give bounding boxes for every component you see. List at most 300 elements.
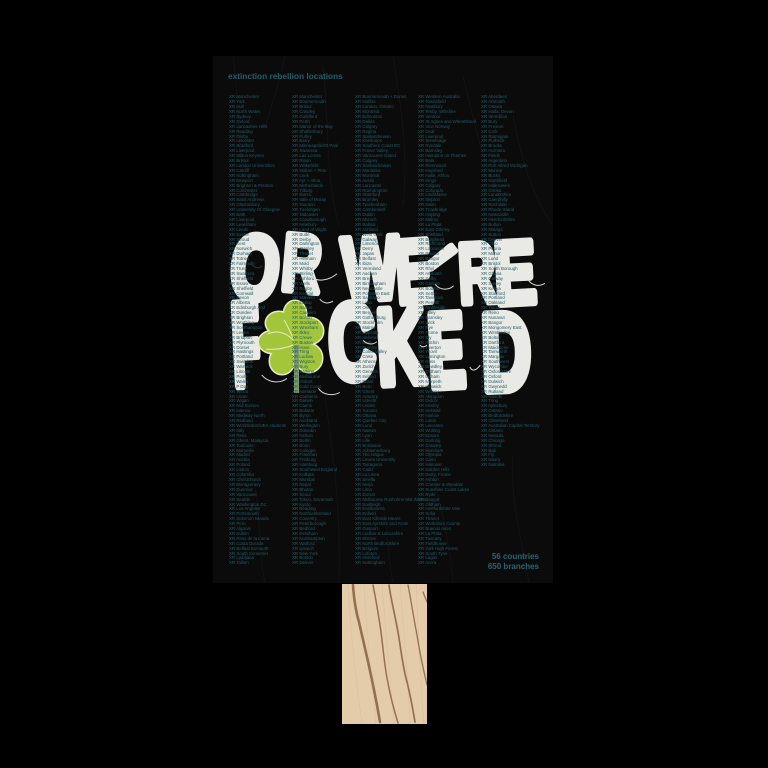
list column 2: XR Buxton xyxy=(292,340,313,345)
list column 4: XR Colorado xyxy=(418,188,443,193)
list column 5: XR Cork xyxy=(481,129,498,134)
list column 3: XR Antwerp xyxy=(355,394,378,399)
list column 3: XR Stockholm xyxy=(355,320,383,325)
list column 5: XR Southwest xyxy=(481,359,509,364)
list column 3: XR Twickenham xyxy=(355,202,387,207)
list column 5: XR Gwynedd xyxy=(481,384,507,389)
list column 1: XR Wigan xyxy=(229,398,249,403)
list column 2: XR Bhutan xyxy=(292,487,313,492)
list column 3: XR Ottawa xyxy=(355,413,376,418)
list column 5: XR Muncie xyxy=(481,168,502,173)
list column 2: XR Ilkley xyxy=(292,330,309,335)
list column 3: XR Galway xyxy=(355,237,377,242)
list column 2: XR Ashford xyxy=(292,276,314,281)
list column 1: XR Lincoln xyxy=(229,369,250,374)
list column 3: XR Lima xyxy=(355,487,372,492)
list column 1: XR Belfast Exmouth xyxy=(229,546,268,551)
list column 2: XR Crawley xyxy=(292,109,315,114)
list column 5: XR Reno xyxy=(481,310,499,315)
list column 1: XR Ljubljana xyxy=(229,555,254,560)
list column 3: XR Manitoba xyxy=(355,168,380,173)
list column 5: XR Rochdale xyxy=(481,202,507,207)
list column 3: XR Kamloops xyxy=(355,138,382,143)
list column 4: XR Deal xyxy=(418,129,434,134)
list column 4: XR Boston xyxy=(418,261,439,266)
list column 2: XR Melbourne xyxy=(292,374,320,379)
list column 4: XR Bangor xyxy=(418,256,439,261)
list column 4: XR Settle xyxy=(418,291,437,296)
list column 1: XR Austria xyxy=(229,457,250,462)
list column 1: XR Sheffield xyxy=(229,276,253,281)
list column 2: XR Tuebingen xyxy=(292,207,320,212)
list column 2: XR Malton + Pitts xyxy=(292,168,326,173)
list column 2: XR Hexham xyxy=(292,256,316,261)
list column 3: XR Eastbourne xyxy=(355,506,385,511)
list column 4: XR Garden Hills xyxy=(418,467,449,472)
list column 3: XR Uppsala xyxy=(355,330,378,335)
list column 4: XR Skipton xyxy=(418,197,440,202)
list column 5: XR Wimbledon xyxy=(481,330,510,335)
list column 3: XR Gosport xyxy=(355,526,378,531)
list column 4: XR Lytham xyxy=(418,374,440,379)
list column 2: XR Ripon xyxy=(292,158,311,163)
list column 3: XR Brest xyxy=(355,276,373,281)
poster wrinkles xyxy=(233,56,553,583)
list column 3: XR Austin xyxy=(355,178,374,183)
list column 4: XR Otley xyxy=(418,310,436,315)
headline: or we're f*cked: E xyxy=(492,223,538,324)
list column 1: XR Lewisham xyxy=(229,222,256,227)
list column 3: XR Nottingham xyxy=(355,560,385,565)
list column 4: XR St Agnes and Wheatsheaf xyxy=(418,119,476,124)
list column 3: XR Elstree xyxy=(355,536,376,541)
list column 1: XR Hastings xyxy=(229,349,253,354)
list column 5: XR Bedfordshire xyxy=(481,413,513,418)
list column 1: XR Tallinn xyxy=(229,560,249,565)
list column 2: XR Purley xyxy=(292,134,312,139)
list column 3: XR Vancouver Island xyxy=(355,153,396,158)
list column 2: XR Nepal xyxy=(292,482,311,487)
list column 3: XR Derry xyxy=(355,246,373,251)
list column 3: XR Potsdam East xyxy=(355,291,390,296)
list column 2: XR Stanley xyxy=(292,246,314,251)
list column 4: XR South Tyne xyxy=(418,551,447,556)
list column 4 xyxy=(418,94,476,565)
headline: or we're f*cked: K xyxy=(374,286,428,407)
list column 4: XR Kings xyxy=(418,178,436,183)
list column 4: XR Accra xyxy=(418,560,436,565)
list column 1: XR Cardiff xyxy=(229,168,249,173)
list column 2: XR Bury xyxy=(292,364,308,369)
list column 3: XR Aachen xyxy=(355,271,377,276)
list column 3: XR Ghent xyxy=(355,389,374,394)
list column 5: XR Newcastle xyxy=(481,212,509,217)
list column 3: XR Lund xyxy=(355,423,372,428)
list column 4: XR Trowbridge xyxy=(418,207,447,212)
list column 5: XR Manor xyxy=(481,251,501,256)
list column 3: XR London, Ontario xyxy=(355,104,394,109)
list column 5: XR Stroud xyxy=(481,443,501,448)
list column 5: XR Bucks xyxy=(481,173,500,178)
list column 5: XR Oakland xyxy=(481,300,505,305)
list column 2: XR Crowborough xyxy=(292,217,326,222)
list column 2: XR Auckland xyxy=(292,418,317,423)
list column 2: XR Tokyo, Savannah xyxy=(292,497,333,502)
list column 5: XR Aberdeen xyxy=(481,94,507,99)
list column 4: XR Frome xyxy=(418,330,438,335)
list column 1: XR Redland xyxy=(229,418,253,423)
list column 5: XR Aylesbury xyxy=(481,403,507,408)
list column 5: XR Haifa, Devon xyxy=(481,109,514,114)
list column 3: XR Toronto xyxy=(355,408,377,413)
list column 2: XR Cologne xyxy=(292,448,316,453)
list column 5: XR Port Alfred Michigan xyxy=(481,163,528,168)
list column 3: XR Lille xyxy=(355,438,370,443)
list column 4: XR Hayshed xyxy=(418,168,443,173)
list column 4: XR Cairo xyxy=(418,457,436,462)
list column 3: XR Dorset xyxy=(355,492,375,497)
list column 2: XR Newbury xyxy=(292,222,317,227)
list column 4: XR Rye xyxy=(418,325,433,330)
list column 4: XR Brecon xyxy=(418,251,439,256)
list column 4: XR Derry, Frome xyxy=(418,472,451,477)
list column 4: XR Hitchin xyxy=(418,340,439,345)
list column 5: XR Dartford xyxy=(481,340,504,345)
list column 2: XR Thanet xyxy=(292,251,313,256)
list column 1: XR London Universities xyxy=(229,163,275,168)
list column 3: XR Dallas xyxy=(355,119,375,124)
list column 3: XR Eastleigh xyxy=(355,502,380,507)
list column 5: XR Yukon xyxy=(481,305,500,310)
list column 4: XR Oldham xyxy=(418,502,441,507)
list column 1: XR South Somerset xyxy=(229,551,268,556)
list column 3: XR Tarragona xyxy=(355,462,382,467)
list column 2: XR Ibarra xyxy=(292,192,311,197)
list column 4: XR Penrith xyxy=(418,300,439,305)
list column 4: XR Barnsley xyxy=(418,148,442,153)
list column 5: XR Fields xyxy=(481,153,500,158)
list column 5: XR Rutland xyxy=(481,389,503,394)
list column 2: XR Tilburg xyxy=(292,188,312,193)
list column 2 xyxy=(292,94,338,565)
list column 3: XR Birmingham xyxy=(355,281,386,286)
list column 3: XR Newcastle xyxy=(355,286,383,291)
list column 4: XR Bewdley xyxy=(418,364,442,369)
list column 3: XR Sevilla xyxy=(355,477,375,482)
list column 1 xyxy=(229,94,286,565)
list column 3: XR Japan xyxy=(355,251,374,256)
list column 5: XR Argentina xyxy=(481,158,507,163)
list column 5: XR Sutton xyxy=(481,232,501,237)
list column 4: XR Horsham xyxy=(418,448,443,453)
list column 3: XR Gothenburg xyxy=(355,315,386,320)
list column 1: XR Solomon Islands xyxy=(229,516,269,521)
list column 1: XR Ghent, Malaysia xyxy=(229,438,268,443)
list column 4: XR La Plata xyxy=(418,222,441,227)
list column 3: XR East Kilbride Mears xyxy=(355,516,400,521)
list column 3: XR Ludlow & Lancashire xyxy=(355,531,403,536)
list column 4: XR Lindisfarne xyxy=(418,192,447,197)
list column 1: XR Lewes xyxy=(229,330,249,335)
list column 4: XR Fieldhouse xyxy=(418,541,447,546)
list column 1: XR Bridport xyxy=(229,335,252,340)
list column 1: XR Essex xyxy=(229,281,248,286)
list column 3: XR Colne Valley xyxy=(355,349,387,354)
list column 1: XR Algarve xyxy=(229,526,251,531)
list column 4: XR Tiverton xyxy=(418,345,441,350)
list column 4: XR Stevenage xyxy=(418,138,446,143)
list column 3: XR Lancaster xyxy=(355,183,382,188)
list column 1: XR Wimbledon/UEA students xyxy=(229,423,286,428)
list column 5: XR Dulwich xyxy=(481,379,504,384)
list column 4: XR Ryedale xyxy=(418,143,441,148)
list column 3: XR Burnley xyxy=(355,345,377,350)
list column 3: XR Roehampton xyxy=(355,188,387,193)
list column 2: XR Hobart xyxy=(292,379,312,384)
list column 3: XR Belgium xyxy=(355,546,378,551)
list column 1: XR Bradford xyxy=(229,143,253,148)
list column 3: XR East Ayrshire and Arran xyxy=(355,521,408,526)
list column 1: XR Derby xyxy=(229,134,248,139)
list column 3: XR Bern xyxy=(355,384,372,389)
list column 4: XR Riverwood xyxy=(418,163,446,168)
list column 3: XR Limerick xyxy=(355,241,379,246)
list column 5: XR Tamworth xyxy=(481,349,507,354)
headline: or we're f*cked: E xyxy=(425,291,468,409)
list column 1: XR Costa Dorada xyxy=(229,541,263,546)
list column 1: XR Swansea xyxy=(229,271,254,276)
list column 1: XR Dorset xyxy=(229,345,249,350)
footer: branch counts xyxy=(488,552,539,571)
list column 2: XR Land of Wight xyxy=(292,227,326,232)
list column 5: XR Bury xyxy=(481,119,497,124)
list column 2: XR Kolkata xyxy=(292,472,314,477)
list column 1: XR Reading xyxy=(229,129,253,134)
list column 5: XR Nevada xyxy=(481,433,503,438)
list column 3: XR Regina xyxy=(355,129,376,134)
list column 4: XR Kirkwall xyxy=(418,408,440,413)
list column 1: XR Southampton xyxy=(229,325,262,330)
list column 4: XR Western Australia xyxy=(418,94,460,99)
list column 1: XR Stroud xyxy=(229,237,249,242)
list column 3: XR Lewes University xyxy=(355,457,396,462)
list column 1: XR Brighton xyxy=(229,315,253,320)
list column 1: XR Plymouth xyxy=(229,340,255,345)
headline: or we're f*cked: R xyxy=(278,218,325,310)
list column 1: XR Totnes xyxy=(229,256,249,261)
list column 5: XR Peoria xyxy=(481,246,501,251)
list column 5: XR Mongomery East xyxy=(481,325,522,330)
list column 4: XR Newbury xyxy=(418,104,443,109)
list column 5: XR Bolton xyxy=(481,222,501,227)
list column 3: XR Bath xyxy=(355,340,371,345)
list column 2: XR Bristol xyxy=(292,104,312,109)
headline: or we're f*cked: O xyxy=(226,216,284,321)
list column 1: XR Newport xyxy=(229,178,253,183)
list column 3: XR Vermland xyxy=(355,266,381,271)
list column 2: XR Mumbai xyxy=(292,477,315,482)
list column 2: XR Shaftesbury xyxy=(292,129,323,134)
list column 1: XR Paso de la Loma xyxy=(229,536,269,541)
list column 3: XR Ballina xyxy=(355,222,376,227)
list column 1: XR Wirral xyxy=(229,389,248,394)
list column 1: XR Lisbon xyxy=(229,467,249,472)
list column 1: XR Oxford xyxy=(229,119,250,124)
list column 3: XR Athens xyxy=(355,359,376,364)
list column 4: XR Hampton on Thames xyxy=(418,153,466,158)
list column 4: XR Townsfield xyxy=(418,99,446,104)
list column 2: XR Barry xyxy=(292,138,310,143)
list column 1: XR Marseille xyxy=(229,448,254,453)
list column 3: XR Basel xyxy=(355,379,373,384)
list column 1: XR Toulouse xyxy=(229,443,254,448)
list column 2: XR Tadcaster xyxy=(292,212,318,217)
list column 1: XR Cambridge xyxy=(229,192,258,197)
headline: or we're f*cked: E xyxy=(393,222,435,322)
list column 3: XR Stamford xyxy=(355,192,380,197)
list column 4: XR Keswick xyxy=(418,384,441,389)
list column 5: XR Maidstone xyxy=(481,345,509,350)
list column 1: XR Cornwall xyxy=(229,291,253,296)
list column 1: XR Vancouver xyxy=(229,492,257,497)
list column 5: XR Bolton xyxy=(481,335,501,340)
list column 3: XR Cadiz xyxy=(355,467,374,472)
list column 5: XR Lanarkshire xyxy=(481,192,511,197)
list column 5: XR Kenya xyxy=(481,286,501,291)
list column 4: XR Burghead xyxy=(418,237,444,242)
list column 2: XR Wakefield xyxy=(292,163,318,168)
list column 1: XR Liverpool xyxy=(229,217,254,222)
list column 2: XR Northampton xyxy=(292,536,325,541)
list column 3: XR Johannesburg xyxy=(355,448,390,453)
list column 4: XR Dorking xyxy=(418,438,440,443)
list column 5: XR Fiji xyxy=(481,452,494,457)
headline: or we're f*cked: ' xyxy=(369,229,475,316)
list column 4: XR Hertfordshire Vale xyxy=(418,506,460,511)
list column 1: XR Poole xyxy=(229,374,248,379)
list column 3: XR Bergen xyxy=(355,310,376,315)
list column 2: XR Freiburg xyxy=(292,457,316,462)
list column 1: XR Mid Sussex xyxy=(229,403,259,408)
list column 3: XR North Bedfordshire xyxy=(355,541,399,546)
list column 2: XR Minneapolis/St Paul xyxy=(292,143,338,148)
heading: extinction rebellion locations: extinction rebellion locations xyxy=(228,71,343,81)
list column 1: XR Nottingham xyxy=(229,173,259,178)
list column 2: XR Darlington xyxy=(292,241,319,246)
list column 1: XR Warwick xyxy=(229,364,253,369)
list column 1: XR Dunmuir xyxy=(229,487,253,492)
list column 2: XR Gold Coast xyxy=(292,384,321,389)
list column 4: XR Crawley xyxy=(418,443,441,448)
footer: branch counts: 650 branches xyxy=(488,562,539,571)
list column 1: XR Brighton & Preston xyxy=(229,183,273,188)
list column 2: XR Peterborough xyxy=(292,521,326,526)
list column 2: XR Stirling xyxy=(292,271,313,276)
list column 4: XR Nairn xyxy=(418,202,436,207)
list column 5: XR Ontario xyxy=(481,428,503,433)
list column 5: XR Northfield xyxy=(481,178,507,183)
list column 1: XR Leicester xyxy=(229,138,254,143)
list column 2: XR Ludlow xyxy=(292,354,313,359)
list column 2: XR Bolton xyxy=(292,315,312,320)
list column 4: XR Ely xyxy=(418,335,431,340)
list column 5: XR Nairobi xyxy=(481,394,502,399)
list column 1: XR Durham xyxy=(229,251,252,256)
list column 3: XR Southern Coast BC xyxy=(355,143,400,148)
list column 4: XR Hayling xyxy=(418,212,440,217)
list column 4: XR Richmond xyxy=(418,241,445,246)
list column 2: XR Derby xyxy=(292,237,311,242)
list column 1: XR Montgomery xyxy=(229,482,261,487)
list column 2: XR Kendal xyxy=(292,291,313,296)
list column 2: XR Manchester xyxy=(292,94,322,99)
list column 4: XR Oldham xyxy=(418,369,441,374)
list column 2: XR Wrexham xyxy=(292,325,318,330)
list column 5: XR Oxford xyxy=(481,374,502,379)
list column 5: XR Vermillion xyxy=(481,114,507,119)
list column 5: XR Nunavut xyxy=(481,315,505,320)
list column 2: XR Bournemouth xyxy=(292,99,326,104)
list column 1: XR Manchester xyxy=(229,94,259,99)
list column 3: XR The Hague xyxy=(355,452,384,457)
list column 3: XR Zurich xyxy=(355,364,375,369)
list column 2: XR Ballarat xyxy=(292,408,314,413)
list column 3: XR West Cork xyxy=(355,232,383,237)
list column 4: XR Olympia xyxy=(418,452,441,457)
list column 2: XR Kyoto xyxy=(292,502,311,507)
list column 1: XR Exeter xyxy=(229,232,249,237)
headline: or we're f*cked: W xyxy=(340,218,402,319)
list column 4: XR Bodmin xyxy=(418,286,440,291)
small curved marks xyxy=(251,264,545,396)
list column 1: XR York xyxy=(229,99,245,104)
list column 2: XR Cairns xyxy=(292,403,312,408)
list column 4: XR Calgary xyxy=(418,183,440,188)
list column 5: XR Caerphilly xyxy=(481,197,508,202)
list column 5: XR Malaga xyxy=(481,227,503,232)
list column 3: XR Hereford xyxy=(355,555,379,560)
list column 2: XR Barking xyxy=(292,369,314,374)
list column 3: XR Lofoten xyxy=(355,551,377,556)
list column 2: XR Canberra xyxy=(292,394,318,399)
list column 4: XR Ventnor xyxy=(418,114,440,119)
list column 4: XR Workshire County xyxy=(418,521,460,526)
list column 1: XR Glastonbury xyxy=(229,202,260,207)
list column 4: XR Buenos Aires xyxy=(418,526,451,531)
wooden stick xyxy=(342,584,427,724)
list column 3: XR Oslo xyxy=(355,305,371,310)
list column 3: XR Montreal xyxy=(355,109,379,114)
list column 5: XR Australian Capital Territory xyxy=(481,423,539,428)
list column 1: XR Portland xyxy=(229,354,253,359)
list column 3: XR Munich xyxy=(355,217,376,222)
list column 4: XR Tuscany xyxy=(418,536,442,541)
list column 2: XR Adelaide xyxy=(292,389,316,394)
list column 3: XR Melbourne Rusholme Mid Wales xyxy=(355,497,426,502)
list column 1: XR Kent xyxy=(229,241,245,246)
list column 4: XR Yeovil xyxy=(418,349,437,354)
list column 2: XR Leek xyxy=(292,173,309,178)
list column 1: XR Falmouth xyxy=(229,261,255,266)
list column 2: XR Wigston xyxy=(292,359,315,364)
list column 4: XR Sunshine Coast Lakes xyxy=(418,487,469,492)
list column 5: XR Namibia xyxy=(481,462,504,467)
list column 1: XR Madrid xyxy=(229,452,250,457)
headline: or we're f*cked: C xyxy=(327,282,377,402)
list column 3: XR Crete xyxy=(355,354,373,359)
list column 5: XR Bangor xyxy=(481,320,502,325)
list column 5: XR Girona xyxy=(481,188,502,193)
